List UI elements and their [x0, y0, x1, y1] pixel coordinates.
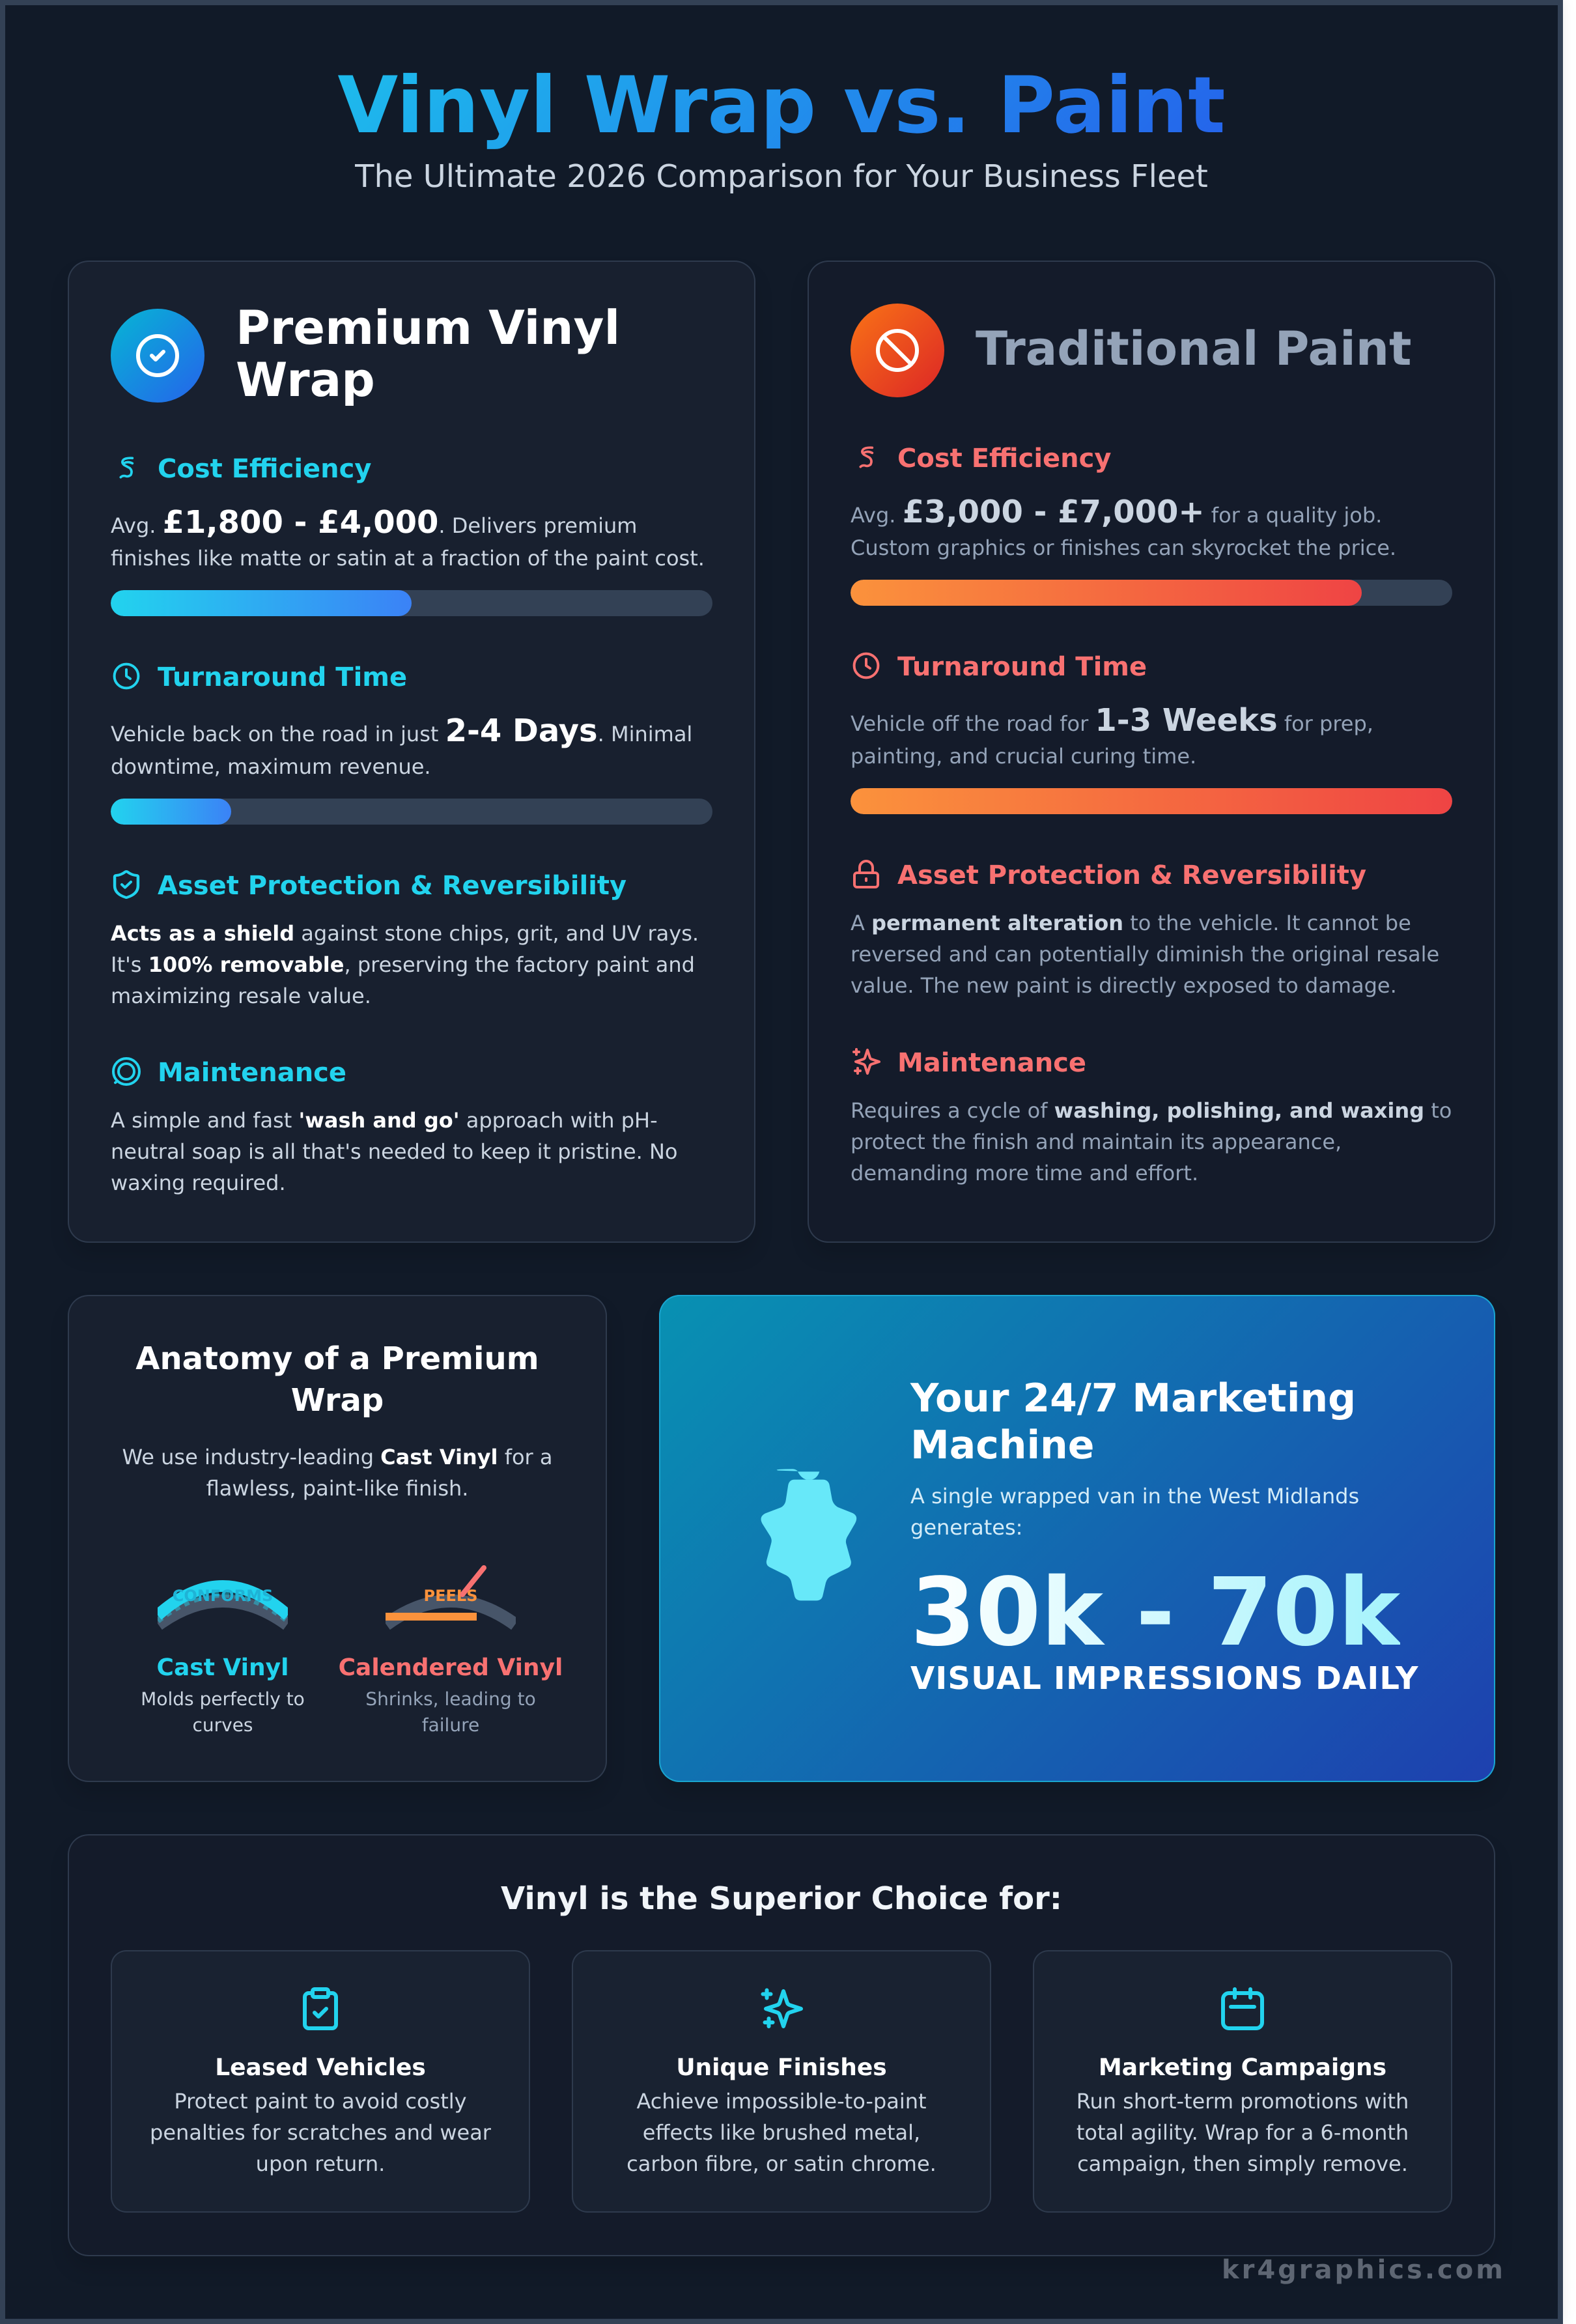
text: A single wrapped van in the West Midlands [910, 1484, 1359, 1509]
heading: Your 24/7 Marketing [910, 1376, 1356, 1421]
text [851, 1098, 1452, 1185]
icon: check circle badge [111, 309, 204, 403]
icon: calendar [1219, 1985, 1266, 2032]
panel: superior choice [68, 1834, 1495, 2256]
text: A simple and fast 'wash and go' approach with pH- [111, 1108, 658, 1133]
icon: clock [853, 653, 879, 679]
text: flawless, paint-like finish. [206, 1476, 468, 1501]
text [910, 1481, 1359, 1543]
text [111, 504, 705, 571]
text: Vehicle back on the road in just 2-4 Days. Minimal [111, 713, 692, 749]
icon: ban badge [851, 304, 944, 397]
text [851, 911, 1439, 998]
text: generates: [910, 1515, 1022, 1540]
heading [910, 1375, 1356, 1469]
text: Acts as a shield against stone chips, grit, and UV rays. [111, 921, 699, 946]
panel: marketing machine [659, 1295, 1495, 1782]
text: Vehicle off the road for 1-3 Weeks for prep, [851, 702, 1373, 739]
text: Run short-term promotions with [1076, 2089, 1409, 2114]
text: We use industry-leading Cast Vinyl for a [122, 1445, 552, 1469]
text: It's 100% removable, preserving the factory paint and [111, 952, 695, 977]
text: maximizing resale value. [111, 984, 371, 1008]
heading: Vinyl is the Superior Choice for: [501, 1880, 1062, 1917]
text: finishes like matte or satin at a fraction of the paint cost. [111, 546, 705, 571]
subtitle: The Ultimate 2026 Comparison for Your Business Fleet [355, 158, 1208, 195]
text: upon return. [256, 2151, 385, 2176]
label: Calendered Vinyl [339, 1654, 563, 1681]
title: Marketing Campaigns [1099, 2054, 1386, 2081]
text: waxing required. [111, 1170, 286, 1195]
progress bar 85% [851, 580, 1452, 606]
caption [337, 1686, 565, 1738]
text: neutral soap is all that's needed to keep it pristine. No [111, 1139, 677, 1164]
section: maintenance [111, 1057, 677, 1195]
icon: sparkle [852, 1048, 880, 1075]
text: Requires a cycle of washing, polishing, and waxing to [851, 1098, 1452, 1123]
progress bar 20% [111, 799, 712, 825]
section: cost efficiency [111, 454, 712, 616]
panel heading: Traditional Paint [976, 321, 1411, 376]
title: Unique Finishes [676, 2054, 887, 2081]
progress bar 100% [851, 788, 1452, 814]
heading: Turnaround Time [158, 662, 407, 692]
caption [109, 1686, 337, 1738]
text: downtime, maximum revenue. [111, 754, 431, 779]
text [572, 2086, 991, 2179]
progress bar 50% [111, 590, 712, 616]
text: demanding more time and effort. [851, 1161, 1198, 1185]
text: value. The new paint is directly exposed to damage. [851, 973, 1397, 998]
section: asset protection [851, 860, 1439, 998]
text: Avg. £3,000 - £7,000+ for a quality job. [851, 494, 1382, 530]
section: cost efficiency [851, 444, 1452, 606]
panel heading: Wrap [236, 352, 375, 407]
text: penalties for scratches and wear [150, 2120, 491, 2145]
heading: Asset Protection & Reversibility [897, 860, 1366, 890]
watermark: kr4graphics.com [1222, 2255, 1506, 2285]
panel heading [236, 300, 620, 407]
section: turnaround time [111, 662, 712, 825]
panel: anatomy of a premium wrap [68, 1295, 607, 1782]
text: effects like brushed metal, [643, 2120, 920, 2145]
heading: Machine [910, 1423, 1094, 1468]
chart: conforming arch: CONFORMS [173, 1587, 273, 1605]
heading: Maintenance [897, 1048, 1086, 1078]
stat text block [910, 1375, 1470, 1701]
text [111, 713, 692, 779]
text [1033, 2086, 1452, 2179]
label: Cast Vinyl [157, 1654, 288, 1681]
section: asset protection [111, 870, 699, 1008]
heading: Wrap [291, 1382, 384, 1419]
panel heading: Premium Vinyl [236, 300, 620, 355]
heading: Asset Protection & Reversibility [158, 871, 626, 901]
chart: peeling arch: PEELS [424, 1587, 477, 1605]
chart: conforming arch [158, 1563, 288, 1635]
icon: clock [113, 663, 139, 689]
text [851, 702, 1373, 769]
caption: Molds perfectly to [141, 1688, 305, 1710]
stat label: VISUAL IMPRESSIONS DAILY [910, 1660, 1419, 1697]
caption: failure [422, 1714, 479, 1736]
heading: Cost Efficiency [897, 444, 1111, 474]
caption: curves [192, 1714, 253, 1736]
text: campaign, then simply remove. [1077, 2151, 1408, 2176]
text: A permanent alteration to the vehicle. It cannot be [851, 911, 1411, 935]
text [111, 2086, 530, 2179]
section: maintenance [851, 1048, 1452, 1185]
panel: traditional paint [808, 261, 1495, 1243]
heading: Cost Efficiency [158, 454, 371, 484]
title: Vinyl Wrap vs. Paint [337, 61, 1226, 151]
icon: currency squiggle [119, 457, 134, 479]
diagram: calendered vinyl [337, 1563, 565, 1752]
card: marketing campaigns [1033, 1950, 1452, 2213]
section: turnaround time [851, 652, 1452, 814]
text: protect the finish and maintain its appearance, [851, 1129, 1342, 1154]
text [68, 1441, 607, 1504]
text: reversed and can potentially diminish the original resale [851, 942, 1439, 967]
text: Achieve impossible-to-paint [636, 2089, 927, 2114]
icon: bottle shape [736, 1446, 879, 1615]
text: carbon fibre, or satin chrome. [626, 2151, 936, 2176]
text [111, 921, 699, 1008]
panel: premium vinyl wrap [68, 261, 755, 1243]
card: leased vehicles [111, 1950, 530, 2213]
text: Avg. £1,800 - £4,000. Delivers premium [111, 504, 637, 541]
heading [68, 1338, 607, 1421]
text [851, 494, 1396, 560]
heading: Anatomy of a Premium [135, 1340, 539, 1377]
icon: clipboard check [297, 1985, 344, 2032]
heading: Maintenance [158, 1058, 346, 1088]
card: unique finishes [572, 1950, 991, 2213]
big number: 30k - 70k [910, 1557, 1400, 1667]
icon: lock [853, 860, 879, 888]
chart: peeling arch [386, 1563, 516, 1635]
heading: Turnaround Time [897, 652, 1147, 682]
text: Protect paint to avoid costly [174, 2089, 467, 2114]
icon: concentric rings [112, 1057, 141, 1086]
diagram: cast vinyl [109, 1563, 337, 1752]
text: painting, and crucial curing time. [851, 744, 1196, 769]
title: Leased Vehicles [215, 2054, 426, 2081]
text [111, 1108, 677, 1195]
text: Custom graphics or finishes can skyrocket the price. [851, 535, 1396, 560]
icon: sparkle [758, 1985, 805, 2032]
caption: Shrinks, leading to [365, 1688, 536, 1710]
icon: currency squiggle [859, 446, 874, 468]
text: total agility. Wrap for a 6-month [1076, 2120, 1409, 2145]
icon: shield check [113, 870, 139, 899]
